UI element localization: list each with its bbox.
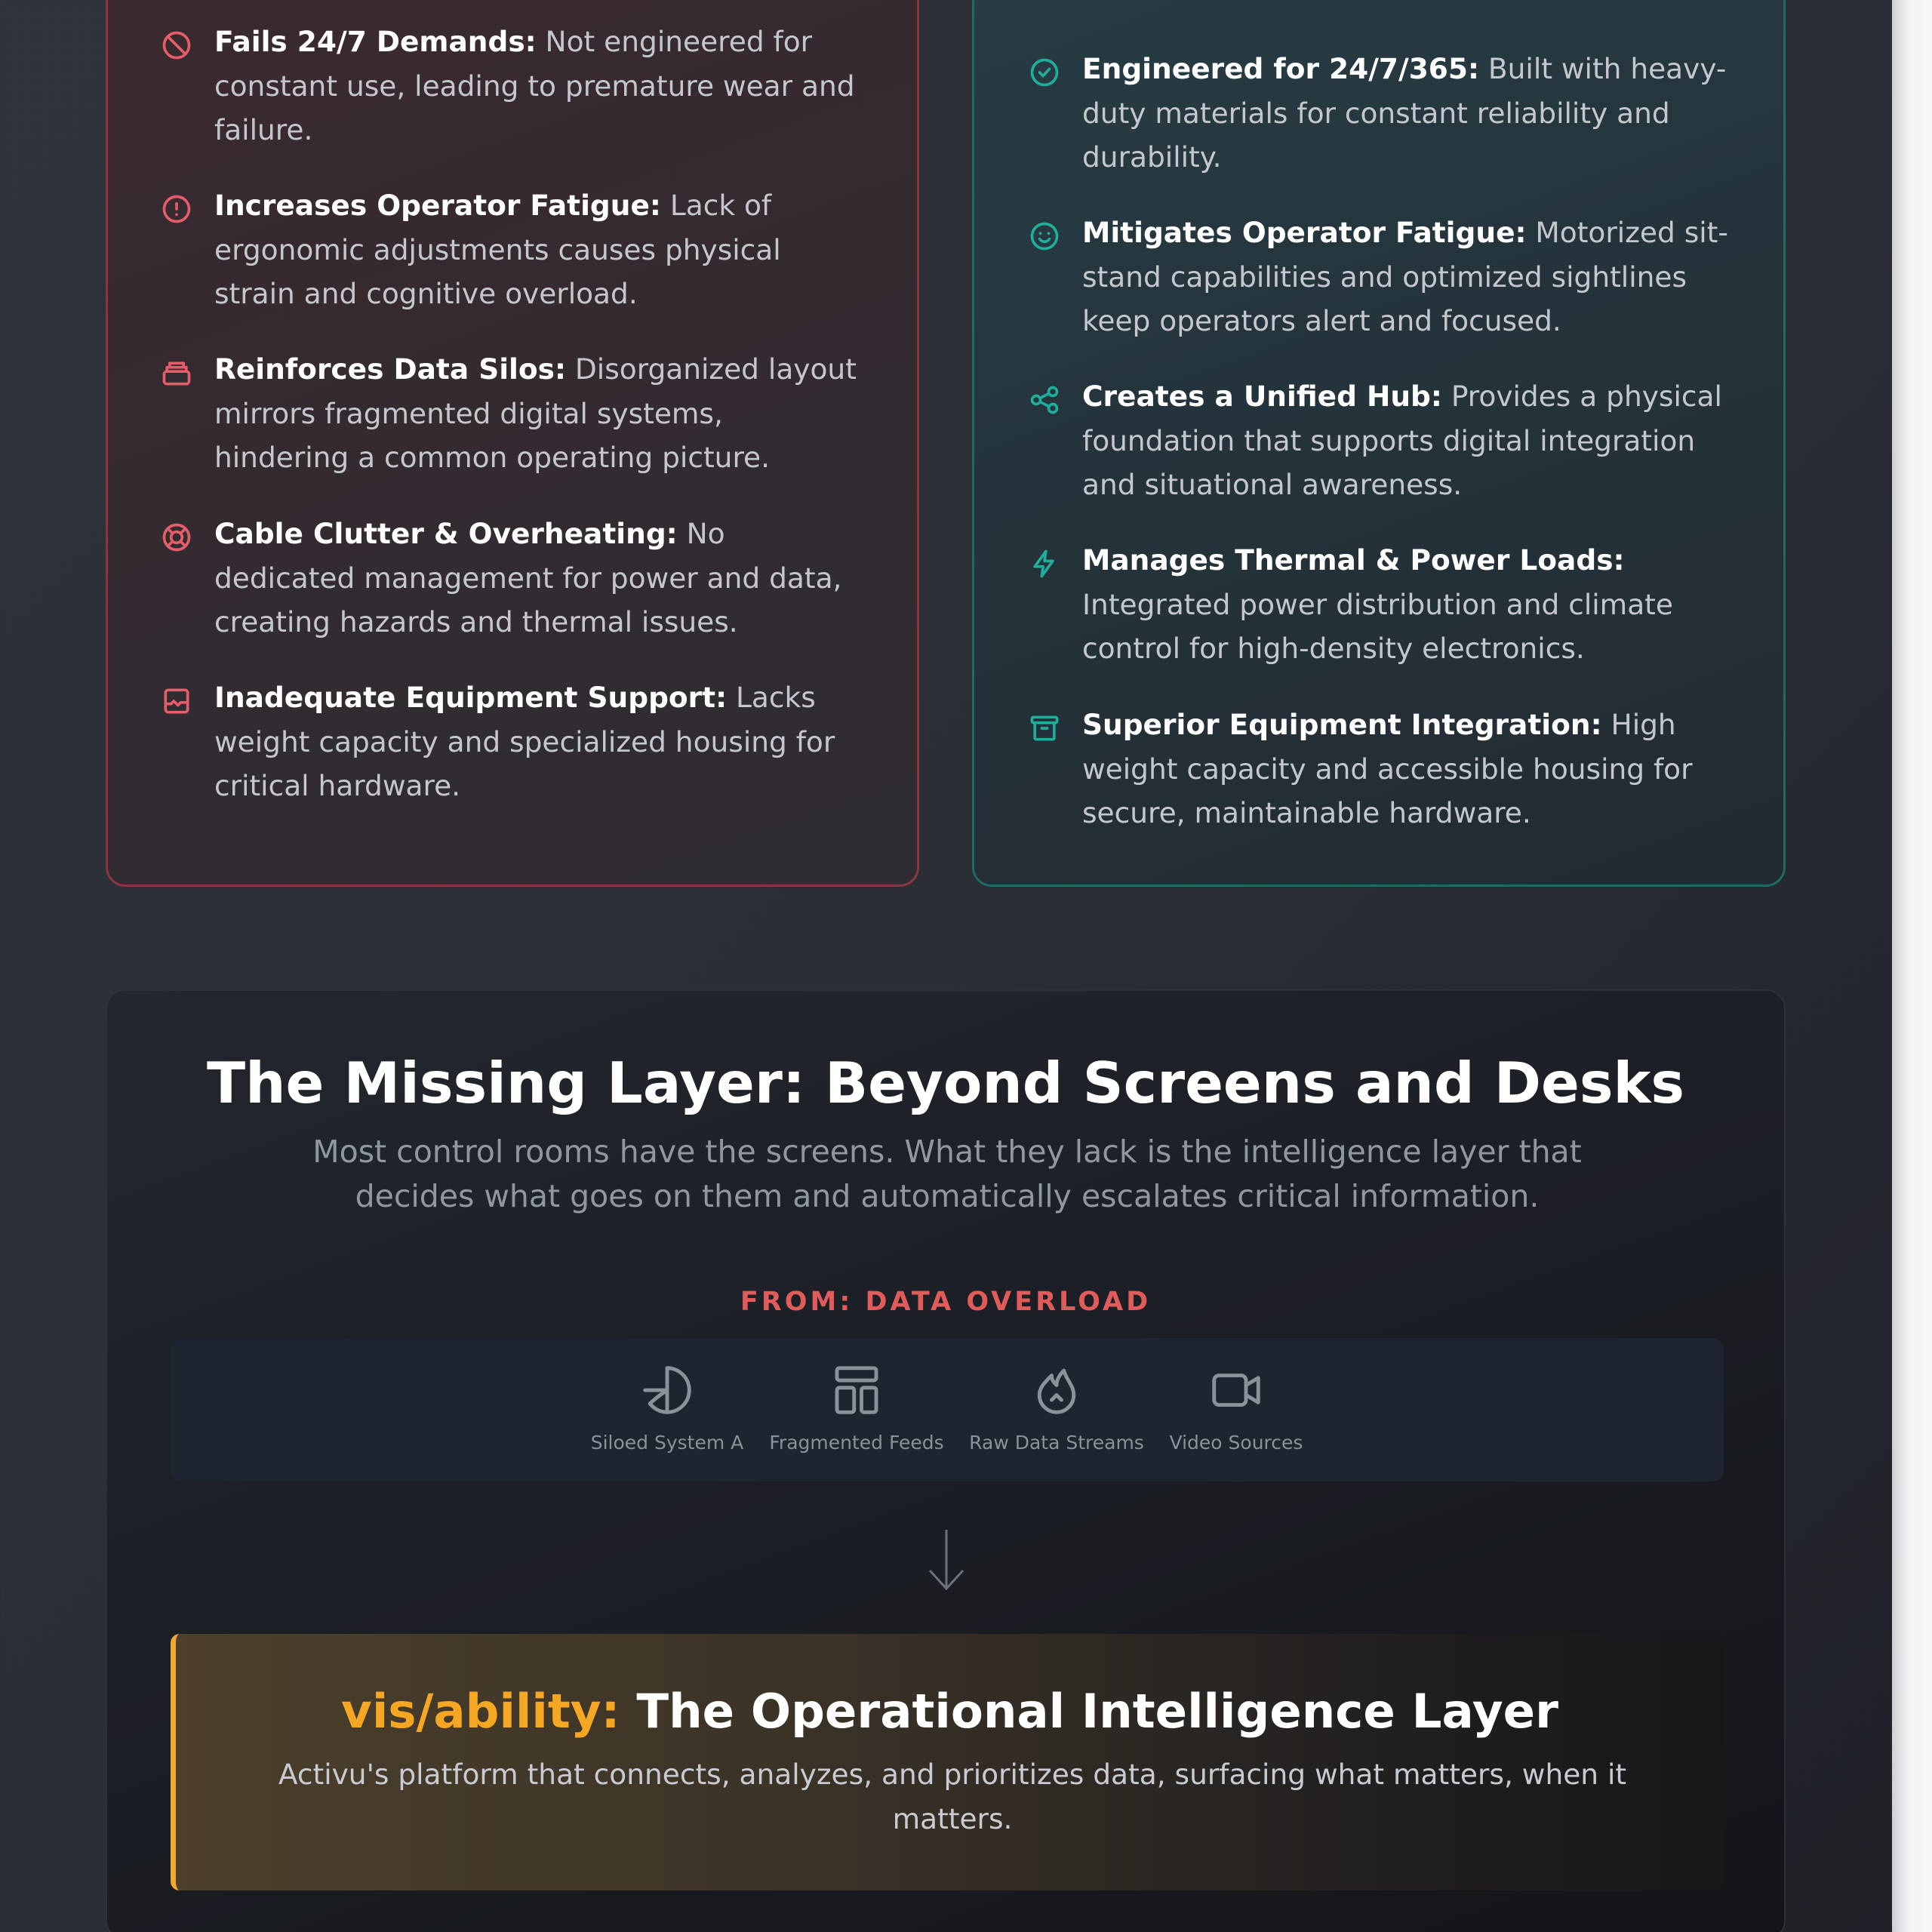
source: video sources: Video Sources xyxy=(1170,1432,1303,1454)
item: fails 24/7: Fails 24/7 Demands: Not engineered for constant use, leading to premature wear and failure. xyxy=(214,25,855,146)
heading: The Missing Layer: Beyond Screens and Desks xyxy=(207,1050,1684,1116)
source: raw data streams xyxy=(969,1369,1144,1454)
data sources box xyxy=(171,1338,1724,1481)
item: engineered 24/7/365: Engineered for 24/7/365: Built with heavy-duty materials for constant reliability and durability. xyxy=(1082,52,1726,174)
source: siloed system xyxy=(591,1366,743,1454)
item: unified hub: Creates a Unified Hub: Provides a physical foundation that supports digital integration and situational awareness. xyxy=(1082,380,1722,501)
callout title: vis/ability: The Operational Intelligence Layer xyxy=(341,1684,1558,1739)
source: video sources xyxy=(1170,1374,1303,1454)
panel: engineered console benefits xyxy=(972,0,1786,887)
label: from data overload: FROM: DATA OVERLOAD xyxy=(740,1287,1151,1317)
item: thermal power: Manages Thermal & Power Loads: Integrated power distribution and climate control for high-density electronics. xyxy=(1082,543,1673,665)
source: raw data streams: Raw Data Streams xyxy=(969,1432,1144,1454)
panel: traditional furniture problems xyxy=(106,0,919,887)
item: equipment integration: Superior Equipment Integration: High weight capacity and accessible housing for secure, maintainable hardware. xyxy=(1082,708,1693,829)
arrow: down xyxy=(929,1530,964,1590)
item: data silos: Reinforces Data Silos: Disorganized layout mirrors fragmented digital systems, hindering a common operating picture. xyxy=(214,352,857,474)
item: cable clutter: Cable Clutter & Overheating: No dedicated management for power and data, creating hazards and thermal issues. xyxy=(214,517,841,638)
item: mitigates fatigue: Mitigates Operator Fatigue: Motorized sit-stand capabilities and optimized sightlines keep operators alert and focused. xyxy=(1082,216,1728,337)
callout: vis/ability xyxy=(171,1634,1724,1890)
item: equipment support: Inadequate Equipment Support: Lacks weight capacity and specialized housing for critical hardware. xyxy=(214,681,835,802)
subtitle: Most control rooms have the screens. What they lack is the intelligence layer that decides what goes on them and automatically escalates critical information. xyxy=(312,1134,1582,1214)
item: operator fatigue: Increases Operator Fatigue: Lack of ergonomic adjustments causes physical strain and cognitive overload. xyxy=(214,189,781,310)
callout description: Activu's platform that connects, analyzes, and prioritizes data, surfacing what matters, when it matters. xyxy=(278,1758,1626,1835)
panel: the missing layer xyxy=(106,989,1786,1932)
source: fragmented feeds: Fragmented Feeds xyxy=(769,1432,944,1454)
source: fragmented feeds xyxy=(769,1366,944,1454)
source: siloed system: Siloed System A xyxy=(591,1432,743,1454)
